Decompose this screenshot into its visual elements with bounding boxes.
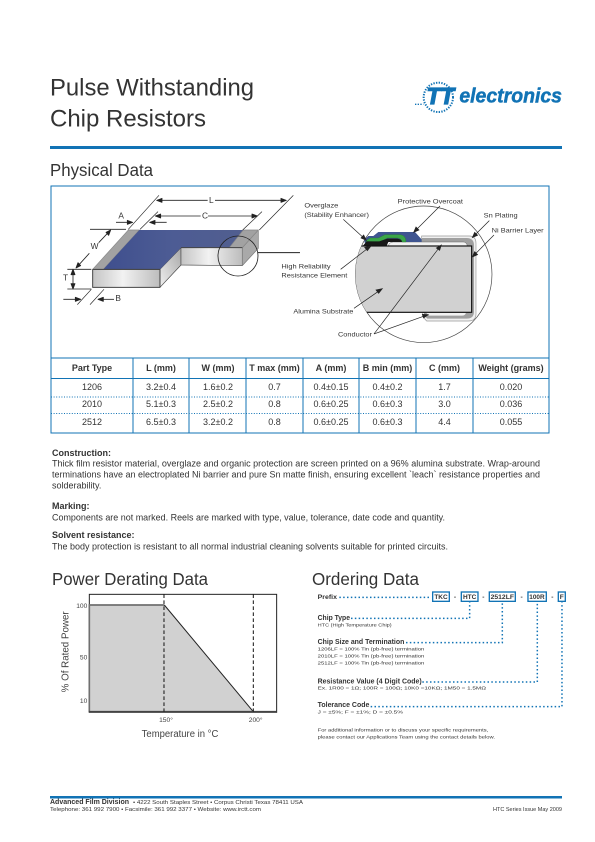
table header row: C (mm) [429, 363, 460, 373]
table rows: 3.2±0.4 [146, 382, 176, 392]
ordering code diagram: TKC [434, 594, 448, 601]
power derating chart: Temperature in °C [142, 729, 218, 740]
lens outline [355, 206, 492, 343]
table header row: A (mm) [316, 363, 346, 373]
ordering notes: 2010LF = 100% Tin (pb-free) termination [318, 654, 425, 660]
ordering code diagram: - [482, 594, 484, 601]
table rows: 2010 [82, 399, 102, 409]
text block: construction: terminations have an electroplated Ni barrier and pure Sn matte finish, ensuring excellent `leach` resistance properties and [52, 470, 540, 480]
table rows: 0.6±0.25 [314, 399, 348, 409]
table rows: 0.4±0.15 [314, 382, 348, 392]
title [50, 74, 254, 132]
footer issue note: HTC Series Issue May 2009 [493, 807, 562, 813]
table header row: T max (mm) [249, 363, 300, 373]
table rows: 0.6±0.3 [373, 417, 402, 427]
table rows: 1.7 [438, 382, 451, 392]
table rows: 0.8 [268, 399, 281, 409]
ordering notes: 1206LF = 100% Tin (pb-free) termination [318, 647, 425, 653]
table header row: B min (mm) [363, 363, 412, 373]
labels: Resistance Element [281, 272, 347, 279]
heading: Ordering Data: Ordering Data [312, 569, 419, 589]
table header row [72, 363, 544, 373]
chip isometric diagram: T [63, 273, 68, 283]
ordering code diagram: 2512LF [491, 594, 514, 601]
labels: High Reliability [281, 263, 331, 270]
logo: TT electronics: TT [427, 83, 456, 109]
text block: construction: Construction: [52, 448, 111, 458]
protective overcoat [364, 232, 422, 243]
ordering labels: Chip Size and Termination [318, 637, 405, 646]
table rows: 6.5±0.3 [146, 417, 176, 427]
panel: physical data frame [51, 186, 549, 358]
axis labels: 100 [76, 603, 88, 610]
table rows: 0.6±0.25 [314, 417, 348, 427]
magnifier circle and leader [218, 236, 300, 276]
ordering code diagram: - [454, 594, 456, 601]
text block: solvent resistance: The body protection is resistant to all normal industrial cleaning solvents suitable for printed circuits. [52, 542, 448, 552]
ordering notes [318, 623, 495, 741]
logo: TT electronics [415, 83, 562, 112]
chip isometric diagram: W [91, 241, 99, 251]
code boxes [433, 592, 565, 601]
table rows: 4.4 [438, 417, 451, 427]
alumina substrate [350, 246, 472, 312]
table rows: 5.1±0.3 [146, 399, 176, 409]
chip isometric diagram: L [209, 195, 214, 205]
table rows: 0.055 [500, 417, 522, 427]
text block: marking: Marking: [52, 501, 90, 511]
ordering notes: please contact our Applications Team using the contact details below. [318, 735, 495, 741]
table rows: 0.020 [500, 382, 522, 392]
text block: solvent resistance: Solvent resistance: [52, 530, 135, 540]
labels: Ni Barrier Layer [492, 227, 544, 234]
resistance element [363, 239, 402, 246]
axis labels: 200° [249, 716, 263, 724]
power derating chart: % Of Rated Power [61, 611, 72, 692]
ordering labels: Prefix [318, 594, 337, 601]
ordering code diagram: 100R [529, 594, 545, 601]
table rows: 0.7 [268, 382, 281, 392]
axis labels: 10 [80, 698, 88, 705]
ordering code diagram: - [551, 594, 553, 601]
ordering labels: Chip Type [318, 613, 350, 622]
table rows: 3.2±0.2 [203, 417, 233, 427]
ordering code diagram [318, 592, 565, 741]
power derating chart [61, 594, 277, 740]
table rows: 0.036 [500, 399, 522, 409]
table rows: 0.6±0.3 [373, 399, 402, 409]
table header row: L (mm) [146, 363, 176, 373]
labels: Sn Plating [484, 213, 518, 220]
axis labels: 150° [159, 716, 173, 724]
cross-section magnified diagram [281, 198, 544, 343]
axis labels [76, 603, 263, 724]
table rows: 1.6±0.2 [203, 382, 233, 392]
table header row: Part Type [72, 363, 112, 373]
text block: construction [52, 448, 540, 490]
table rows: 2.5±0.2 [203, 399, 233, 409]
heading: Power Derating Data: Power Derating Data [52, 569, 208, 589]
title: Chip Resistors [50, 106, 206, 132]
chip isometric diagram: B [115, 293, 121, 303]
ordering code diagram: - [521, 594, 523, 601]
dimension lines [63, 195, 293, 305]
footer address: • 4222 South Staples Street • Corpus Christi Texas 78411 USA [133, 800, 303, 806]
header rule [50, 146, 562, 149]
Sn plating and Ni barrier terminals [422, 236, 476, 321]
ordering notes: HTC (High Temperature Chip) [318, 623, 392, 629]
data table [51, 358, 549, 433]
ordering notes: Ex. 1R00 = 1Ω; 100R = 100Ω; 10K0 =10KΩ; 1M50 = 1.5MΩ [318, 686, 486, 692]
ordering code diagram: HTC [463, 594, 476, 601]
ordering labels: Resistance Value (4 Digit Code) [318, 676, 422, 685]
table rows: 3.0 [438, 399, 451, 409]
text block: solvent resistance [52, 530, 448, 552]
heading: Physical Data: Physical Data [50, 160, 153, 180]
ordering code diagram: F [560, 594, 564, 601]
table rows [82, 382, 522, 427]
dotted connectors [339, 597, 562, 707]
labels [281, 198, 544, 339]
table rows: 1206 [82, 382, 102, 392]
table rows: 0.8 [268, 417, 281, 427]
ordering notes: J = ±5%; F = ±1%; D = ±0.5% [318, 710, 404, 716]
chip isometric diagram: C [202, 211, 208, 221]
text block: construction: Thick film resistor material, overglaze and organic protection are screen printed on a 96% alumina substrate. Wrap-around [52, 458, 540, 468]
logo: TT electronics: electronics [459, 84, 562, 107]
ordering labels [318, 594, 422, 709]
footer rule [50, 796, 562, 798]
leader arrows [341, 206, 494, 334]
footer address: Advanced Film Division [50, 797, 129, 806]
labels: Overglaze [304, 203, 339, 210]
text block: construction: solderability. [52, 480, 101, 490]
labels: (Stability Enhancer) [304, 212, 369, 219]
text block: marking: Components are not marked. Reels are marked with type, value, tolerance, date code and quantity. [52, 512, 445, 522]
chip isometric diagram: A [118, 211, 124, 221]
derating curve area [89, 605, 253, 712]
ordering notes: For additional information or to discuss your specific requirements, [318, 728, 488, 734]
table rows: 0.4±0.2 [373, 382, 402, 392]
ordering labels: Tolerance Code [318, 700, 369, 709]
axis labels: 50 [80, 655, 88, 662]
overglaze [365, 235, 406, 242]
table header row: W (mm) [202, 363, 234, 373]
footer address [50, 797, 303, 813]
footer address: Telephone: 361 992 7900 • Facsimile: 361 992 3377 • Website: www.irctt.com [50, 807, 261, 813]
labels: Protective Overcoat [398, 198, 463, 205]
text block: marking [52, 501, 445, 522]
table rows: 2512 [82, 417, 102, 427]
labels: Alumina Substrate [293, 308, 354, 315]
labels: Conductor [338, 332, 373, 339]
title: Pulse Withstanding [50, 74, 254, 102]
chip isometric diagram [63, 195, 300, 305]
ordering notes: 2512LF = 100% Tin (pb-free) termination [318, 661, 425, 667]
table header row: Weight (grams) [478, 363, 544, 373]
